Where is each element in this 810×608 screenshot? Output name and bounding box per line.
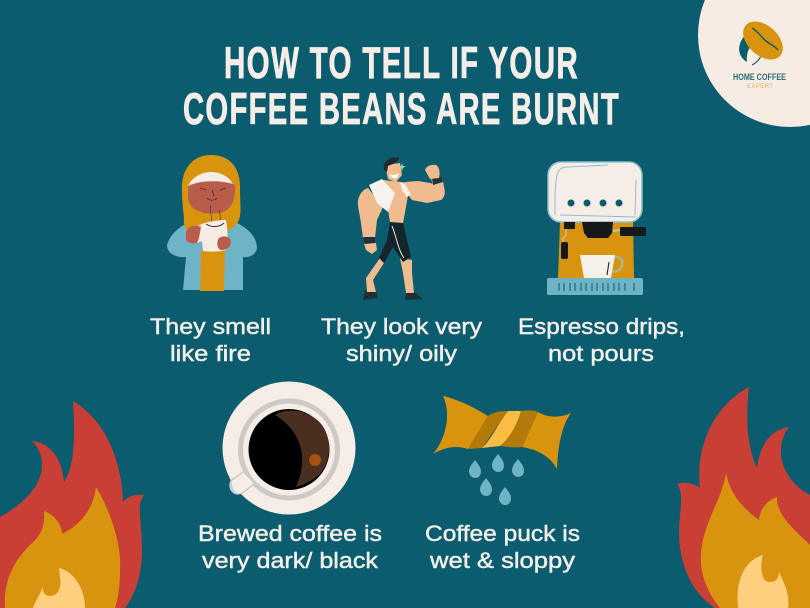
logo badge [698, 0, 810, 127]
icon: muscular man [358, 158, 445, 300]
label: espresso: Espresso drips, [518, 314, 685, 339]
label: brewed coffee: very dark/ black [202, 548, 379, 573]
label: coffee puck: Coffee puck is [425, 521, 580, 546]
label: smell [150, 314, 271, 366]
label: shiny [321, 314, 482, 366]
label: shiny: shiny/ oily [346, 341, 457, 366]
label: shiny: They look very [321, 314, 482, 339]
label: coffee puck: wet & sloppy [429, 548, 575, 573]
label: smell: They smell [150, 314, 271, 339]
icon: espresso machine [547, 162, 646, 295]
icon: right flame [677, 387, 810, 608]
logo badge: HOME COFFEE [733, 72, 786, 82]
label: smell: like fire [170, 341, 251, 366]
icon: top view coffee cup [222, 382, 356, 514]
label: espresso [518, 314, 685, 366]
icon: left flame [0, 401, 144, 608]
title [183, 39, 620, 134]
label: brewed coffee [198, 521, 382, 573]
icon: wet coffee puck [433, 396, 571, 505]
label: espresso: not pours [548, 341, 654, 366]
logo badge: EXPERT [747, 84, 773, 90]
label: brewed coffee: Brewed coffee is [198, 521, 382, 546]
title: HOW TO TELL IF YOUR [224, 39, 579, 88]
label: coffee puck [425, 521, 580, 573]
icon: woman smelling coffee [167, 155, 257, 291]
